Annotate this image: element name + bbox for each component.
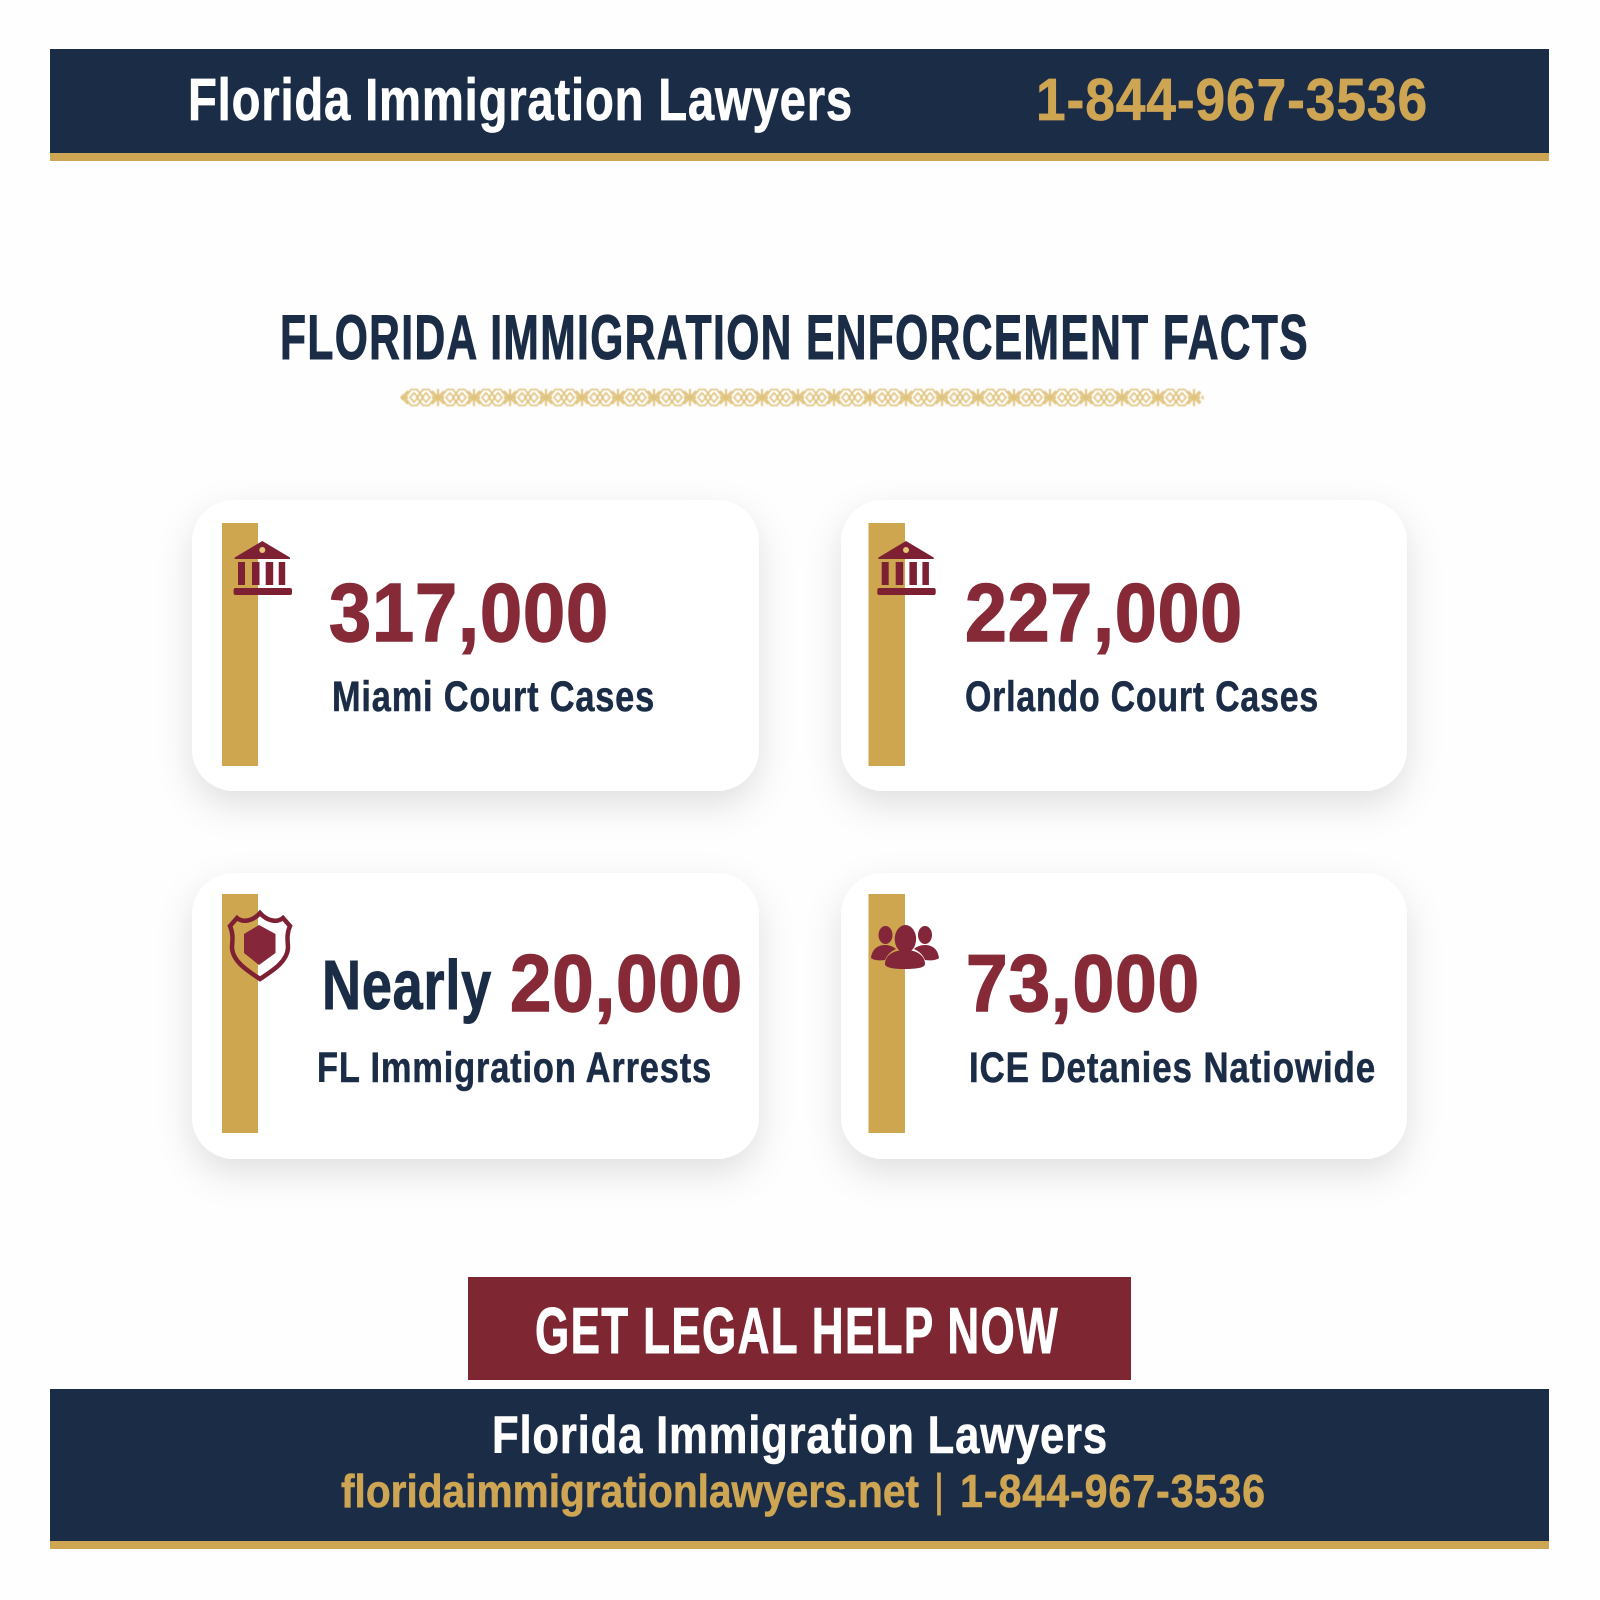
header firm name: Florida Immigration Lawyers [188,67,853,133]
ornamental gold divider [400,388,1205,407]
footer bar [50,1389,1549,1549]
figure: 73,000: 73,000 [966,939,1200,1029]
icon: courthouse [234,541,292,595]
header bar [50,49,1549,161]
panel: Florida immigration arrests [192,873,759,1159]
icon: courthouse [877,541,936,595]
figure: 227,000: 227,000 [965,566,1243,659]
label: ICE Detanies Natiowide: ICE Detanies Natiowide [969,1044,1376,1092]
panel: Orlando court cases [841,500,1407,791]
icon: group of people [871,925,939,969]
call to action button [468,1277,1131,1380]
call to action button: GET LEGAL HELP NOW [535,1294,1059,1367]
header phone number: 1-844-967-3536 [1036,67,1428,133]
footer firm name: Florida Immigration Lawyers [492,1406,1108,1465]
icon: shield [230,913,290,979]
footer website and phone [341,1464,1266,1517]
label: FL Immigration Arrests: FL Immigration Arrests [317,1044,712,1092]
panel: ICE detainees nationwide [841,873,1407,1159]
figure: 20,000: 20,000 [510,939,743,1029]
qualifier: Nearly: Nearly [322,946,492,1024]
label: Miami Court Cases: Miami Court Cases [332,673,655,721]
label: Orlando Court Cases: Orlando Court Cases [965,673,1319,721]
footer website and phone: | [933,1464,945,1516]
footer website and phone: floridaimmigrationlawyers.net [341,1465,919,1517]
figure: 317,000: 317,000 [329,566,609,659]
panel: Miami court cases [192,500,759,791]
footer website and phone: 1-844-967-3536 [960,1465,1266,1517]
